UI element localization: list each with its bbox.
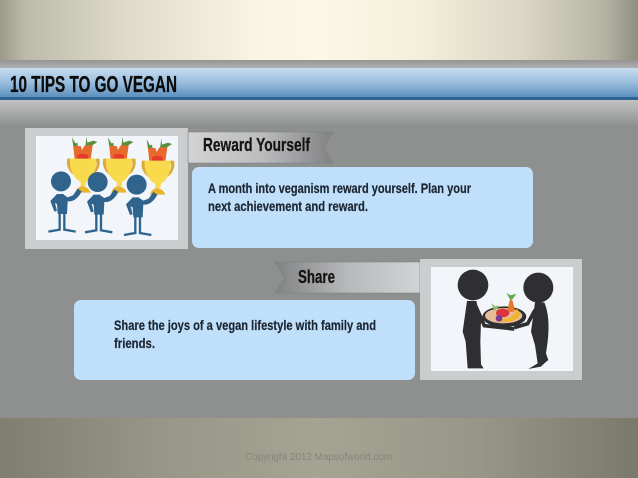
text box bbox=[74, 300, 415, 380]
plate of food bbox=[485, 293, 522, 323]
title: 10 TIPS TO GO VEGAN bbox=[10, 71, 177, 97]
ribbon: share bbox=[275, 262, 420, 293]
ribbon: reward yourself bbox=[188, 132, 333, 163]
icon: three blue figures bbox=[48, 171, 157, 235]
title bar bbox=[0, 60, 638, 126]
body text: A month into veganism reward yourself. Plan your bbox=[208, 180, 471, 196]
panel: reward yourself bbox=[25, 128, 533, 249]
icon: two figures holding a plate bbox=[458, 270, 553, 369]
body text: friends. bbox=[114, 335, 155, 351]
image frame: sharing food bbox=[420, 259, 582, 380]
ribbon label: Reward Yourself bbox=[203, 135, 311, 155]
ribbon label: Share bbox=[298, 267, 335, 287]
bottom beige band bbox=[0, 418, 638, 478]
image frame: trophies bbox=[25, 128, 188, 249]
text box bbox=[192, 167, 533, 248]
body text: next achievement and reward. bbox=[208, 198, 368, 214]
panel: share bbox=[74, 259, 582, 380]
icon: three trophies with vegetables bbox=[67, 137, 174, 195]
top beige band bbox=[0, 0, 638, 60]
body text: Share the joys of a vegan lifestyle with family and bbox=[114, 317, 376, 333]
copyright footer: Copyright 2012 Mapsofworld.com bbox=[245, 452, 392, 463]
